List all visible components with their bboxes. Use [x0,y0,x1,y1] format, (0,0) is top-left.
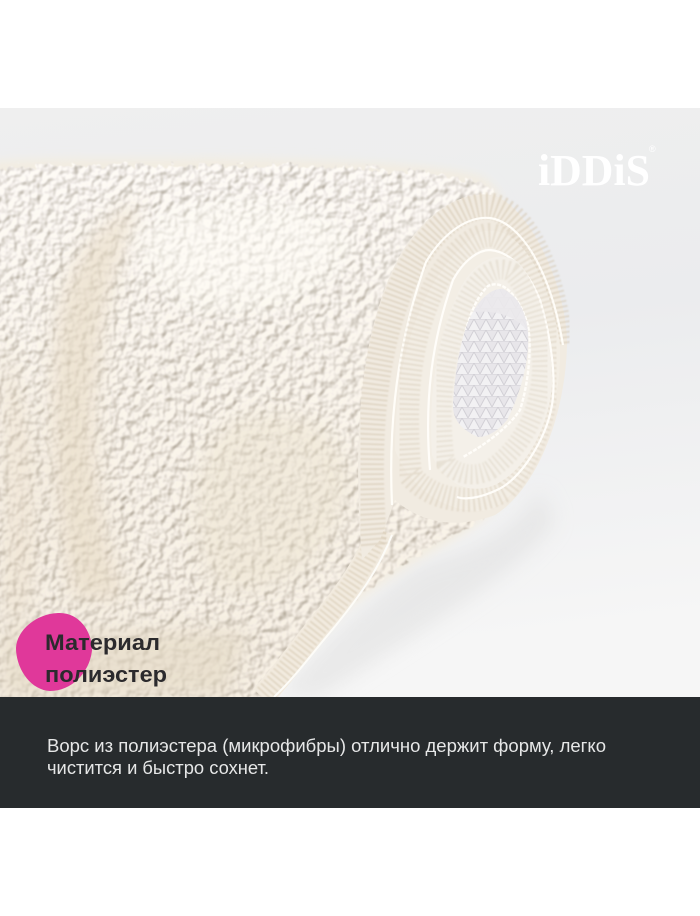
logo: IDDIS: ® [649,144,656,154]
description text [47,736,606,778]
rug pile texture [0,165,515,700]
description band [0,697,700,808]
rug pile soft edge [0,158,515,700]
material badge: pink blob with heading [16,613,167,691]
icon: pink blob [16,613,92,691]
photo: rolled bath mat [0,108,700,700]
heading: material [45,630,167,687]
floor shadow [275,490,555,697]
roll outer fold [358,194,567,560]
roll inner fold [431,257,552,489]
flat edge binding [262,530,392,697]
description text: чистится и быстро сохнет. [47,758,269,778]
rug shaded tones [0,200,350,697]
heading: material: полиэстер [45,662,167,687]
heading: material: Материал [45,630,160,655]
logo: IDDIS: iDDiS [538,146,650,195]
roll middle fold [395,230,560,511]
description text: Ворс из полиэстера (микрофибры) отлично держит форму, легко [47,736,606,756]
roll hole with triangular mesh backing [453,289,528,437]
